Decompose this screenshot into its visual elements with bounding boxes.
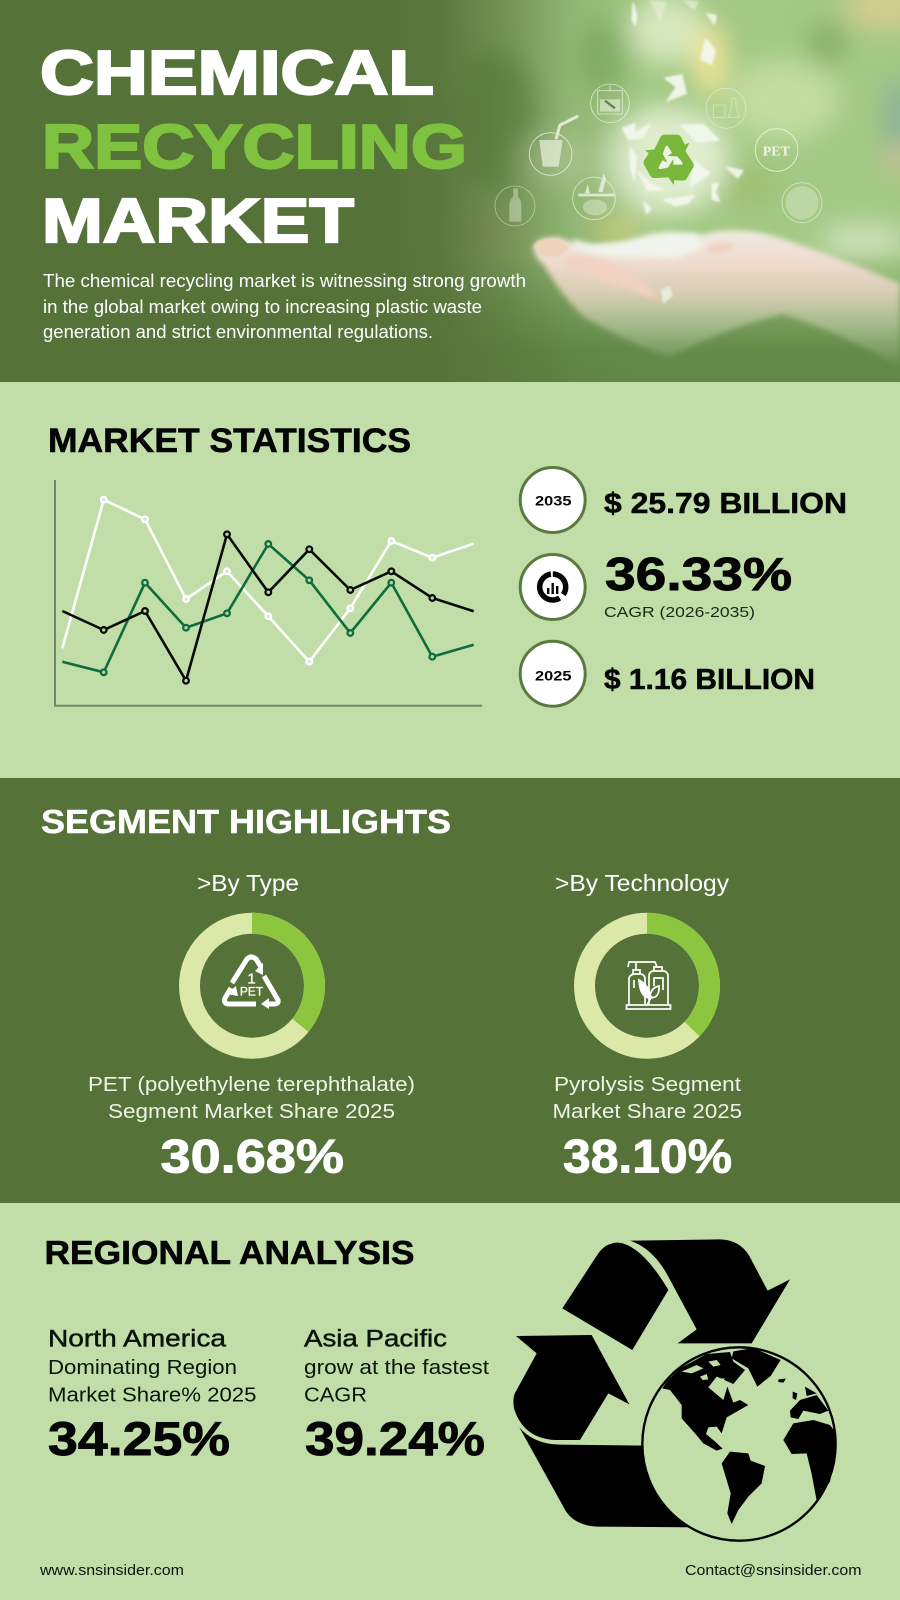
region: Asia Pacific: 39.24%: [305, 1412, 485, 1465]
icon: recycling arrows with globe: [513, 1239, 836, 1541]
donut: PET share: [190, 923, 314, 1048]
segment: by technology: [552, 870, 742, 1182]
region: North America: North America: [48, 1326, 227, 1352]
series: white line: [62, 497, 474, 664]
icon ring: PET label: [755, 129, 798, 171]
title: CHEMICAL: [40, 39, 434, 108]
series: green line: [62, 541, 474, 675]
panel: market statistics: [0, 382, 900, 778]
heading: segment highlights: SEGMENT HIGHLIGHTS: [41, 803, 451, 840]
icon ring: lab containers: [706, 88, 746, 128]
stat: 2035 value: [520, 468, 847, 532]
region: Asia Pacific: CAGR: [304, 1384, 367, 1406]
line chart: [55, 480, 482, 706]
description text: The chemical recycling market is witnessing strong growth: [43, 271, 526, 291]
stat: 2035 value: $ 25.79 BILLION: [604, 488, 847, 520]
segment: by technology: >By Technology: [555, 870, 730, 896]
hero photo: hand and recycling icons: [390, 0, 900, 382]
title: [40, 39, 467, 256]
hand: [533, 230, 900, 367]
icon: recycling symbol: [638, 135, 699, 189]
region: Asia Pacific: Asia Pacific: [304, 1326, 447, 1352]
stat: CAGR: CAGR (2026-2035): [604, 604, 755, 621]
series: black line: [62, 532, 474, 684]
footer: website: www.snsinsider.com: [39, 1562, 184, 1579]
region: North America: [48, 1326, 256, 1465]
icon ring: shredded plastic: [573, 174, 615, 220]
donut: pyrolysis share: [584, 923, 710, 1048]
title: MARKET: [42, 187, 354, 256]
region: Asia Pacific: [304, 1326, 489, 1465]
panel: segment highlights: [0, 778, 900, 1203]
stat: CAGR: [520, 548, 792, 621]
stat: 2025 value: [520, 641, 815, 706]
region: North America: Market Share% 2025: [48, 1384, 256, 1406]
segment: by type: >By Type: [197, 870, 299, 896]
globe: [642, 1347, 836, 1541]
description text: generation and strict environmental regulations.: [43, 322, 433, 342]
segment: by technology: 38.10%: [563, 1130, 732, 1182]
icon ring: recycle bin: [529, 116, 578, 175]
stat: 2025 value: 2025: [535, 668, 572, 684]
description text: [43, 271, 526, 342]
stat: CAGR: 36.33%: [605, 548, 792, 600]
segment: by type: 30.68%: [160, 1130, 344, 1182]
stat: 2025 value: $ 1.16 BILLION: [604, 664, 815, 696]
region: Asia Pacific: grow at the fastest: [304, 1357, 489, 1379]
panel: regional analysis: [0, 1203, 900, 1600]
icon ring: globe: [782, 183, 822, 223]
icon: PET resin code: 1: [247, 970, 256, 988]
icon: chart donut: [540, 574, 566, 600]
segment: by type: [88, 870, 415, 1182]
icon ring: PET label: PET: [763, 145, 791, 160]
icon: PET resin code: PET: [240, 984, 264, 998]
footer: contact: Contact@snsinsider.com: [685, 1562, 862, 1579]
segment: by type: Segment Market Share 2025: [108, 1101, 395, 1123]
segment: by technology: Market Share 2025: [552, 1101, 742, 1123]
heading: regional analysis: REGIONAL ANALYSIS: [44, 1234, 414, 1271]
icon ring: plastic bottle: [495, 186, 535, 226]
heading: market statistics: MARKET STATISTICS: [48, 422, 411, 460]
stat: 2035 value: 2035: [535, 494, 572, 508]
plastic flakes: [623, 1, 743, 213]
segment: by type: PET (polyethylene terephthalate): [88, 1074, 415, 1096]
segment: by technology: Pyrolysis Segment: [554, 1074, 741, 1096]
region: North America: 34.25%: [48, 1412, 230, 1465]
region: North America: Dominating Region: [48, 1357, 237, 1379]
panel: hero header: [0, 0, 900, 382]
title: RECYCLING: [42, 113, 467, 182]
icon: PET resin code: [224, 957, 278, 1009]
icon: bottles with leaf: [626, 962, 670, 1009]
icon ring: bottle in machine: [591, 84, 629, 123]
description text: in the global market owing to increasing plastic waste: [43, 297, 482, 317]
